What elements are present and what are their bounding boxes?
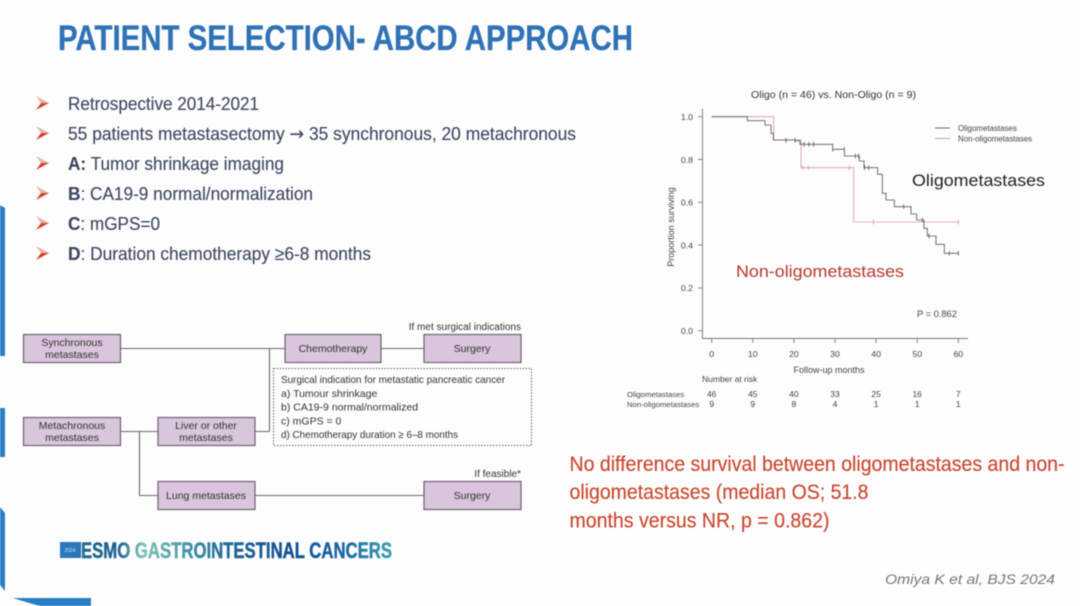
box: synchronous metastases: metastases [45, 349, 99, 361]
box: surgical indication criteria: Surgical indication for metastatic pancreatic cancer [281, 374, 505, 386]
chart title: Oligo (n = 46) vs. Non-Oligo (n = 9) [751, 89, 916, 101]
x axis labels: 30 [830, 349, 840, 359]
y axis labels: Proportion surviving [666, 187, 676, 267]
logo: ESMO Gastrointestinal Cancers: 2024 [64, 548, 76, 554]
box: surgical indication criteria: c) mGPS = 0 [281, 416, 342, 428]
bullet: patients: 55 patients metastasectomy → 35 synchronous, 20 metachronous [68, 123, 576, 145]
number at risk table: 7 [956, 389, 961, 399]
x axis labels [709, 349, 963, 375]
number at risk table: 9 [750, 399, 755, 409]
bullet: D: D: Duration chemotherapy ≥6-8 months [68, 243, 371, 264]
x axis labels: Follow-up months [793, 365, 865, 375]
y axis labels: 0.4 [681, 240, 693, 250]
box: surgical indication criteria: a) Tumour shrinkage [281, 388, 377, 400]
box: metachronous metastases: metastases [45, 432, 99, 444]
number at risk table: 4 [833, 399, 838, 409]
curve: non-oligometastases [712, 117, 958, 224]
x axis labels: 60 [953, 349, 963, 359]
label: oligometastases: Oligometastases [912, 171, 1045, 190]
axes [698, 109, 968, 343]
flowchart [24, 322, 532, 510]
number at risk table [627, 374, 961, 409]
label: if feasible: If feasible* [474, 469, 521, 480]
box: surgical indication criteria [274, 368, 532, 446]
logo: ESMO Gastrointestinal Cancers: ESMO GASTROINTESTINAL CANCERS [81, 538, 392, 563]
x axis labels: 50 [912, 349, 922, 359]
box: liver or other metastases: metastases [179, 432, 233, 444]
number at risk table: 40 [789, 389, 799, 399]
title: PATIENT SELECTION- ABCD APPROACH [58, 19, 633, 58]
number at risk table: 9 [709, 399, 714, 409]
box: surgical indication criteria: b) CA19-9 normal/normalized [281, 402, 418, 414]
y axis labels: 0.2 [681, 283, 693, 293]
box: synchronous metastases: Synchronous [41, 337, 103, 349]
label: if met surgical indications: If met surgical indications [409, 322, 521, 333]
bullet: B: B: CA19-9 normal/normalization [68, 183, 313, 204]
box: surgical indication criteria: d) Chemotherapy duration ≥ 6–8 months [281, 429, 458, 441]
x axis labels: 40 [871, 349, 881, 359]
box: synchronous metastases [24, 334, 120, 362]
x axis labels: 10 [748, 349, 758, 359]
box: surgery bottom: Surgery [454, 490, 491, 502]
conclusion text [570, 453, 1065, 532]
box: metachronous metastases: Metachronous [39, 420, 105, 432]
number at risk table: Non-oligometastases [627, 400, 699, 409]
box: chemotherapy [285, 334, 381, 362]
curve: oligometastases [712, 117, 958, 256]
box: surgery bottom [424, 482, 521, 510]
label: non-oligometastases: Non-oligometastases [736, 262, 904, 281]
box: lung metastases: Lung metastases [166, 490, 246, 502]
decorative left edge shapes [0, 205, 91, 606]
legend: Oligometastases [958, 124, 1017, 133]
bullet: A: A: Tumor shrinkage imaging [68, 153, 284, 174]
box: chemotherapy: Chemotherapy [299, 343, 368, 355]
box: liver or other metastases [158, 418, 255, 446]
y axis labels: 0.6 [681, 198, 693, 208]
number at risk table: 46 [707, 389, 717, 399]
bullet list [36, 93, 576, 264]
bullet: retrospective: Retrospective 2014-2021 [68, 93, 259, 114]
box: surgery top [424, 334, 521, 362]
number at risk table: 1 [915, 399, 920, 409]
x axis labels: 20 [789, 349, 799, 359]
number at risk table: 8 [792, 399, 797, 409]
x axis labels: 0 [709, 349, 714, 359]
conclusion text: oligometastases (median OS; 51.8 [570, 481, 868, 504]
number at risk table: 33 [830, 389, 840, 399]
number at risk table: 1 [956, 399, 961, 409]
survival chart [627, 89, 1045, 409]
y axis labels: 0.8 [681, 155, 693, 165]
number at risk table: 16 [912, 389, 922, 399]
curves [712, 117, 958, 256]
box: metachronous metastases [24, 418, 120, 446]
y axis labels [666, 112, 693, 336]
conclusion text: months versus NR, p = 0.862) [570, 510, 830, 532]
citation: Omiya K et al, BJS 2024 [885, 571, 1055, 587]
bullet: C: C: mGPS=0 [68, 213, 160, 234]
y axis labels: 1.0 [681, 112, 693, 122]
box: lung metastases [158, 482, 255, 510]
legend: Non-oligometastases [958, 134, 1032, 144]
number at risk table: Oligometastases [627, 390, 684, 399]
y axis labels: 0.0 [681, 326, 693, 336]
p value: P = 0.862 [917, 309, 957, 319]
number at risk table: 1 [874, 399, 879, 409]
number at risk table: 25 [871, 389, 881, 399]
box: liver or other metastases: Liver or other [175, 420, 237, 432]
box: surgery top: Surgery [454, 343, 491, 355]
number at risk table: 45 [748, 389, 758, 399]
number at risk table: Number at risk [702, 374, 758, 384]
legend [935, 124, 1032, 144]
